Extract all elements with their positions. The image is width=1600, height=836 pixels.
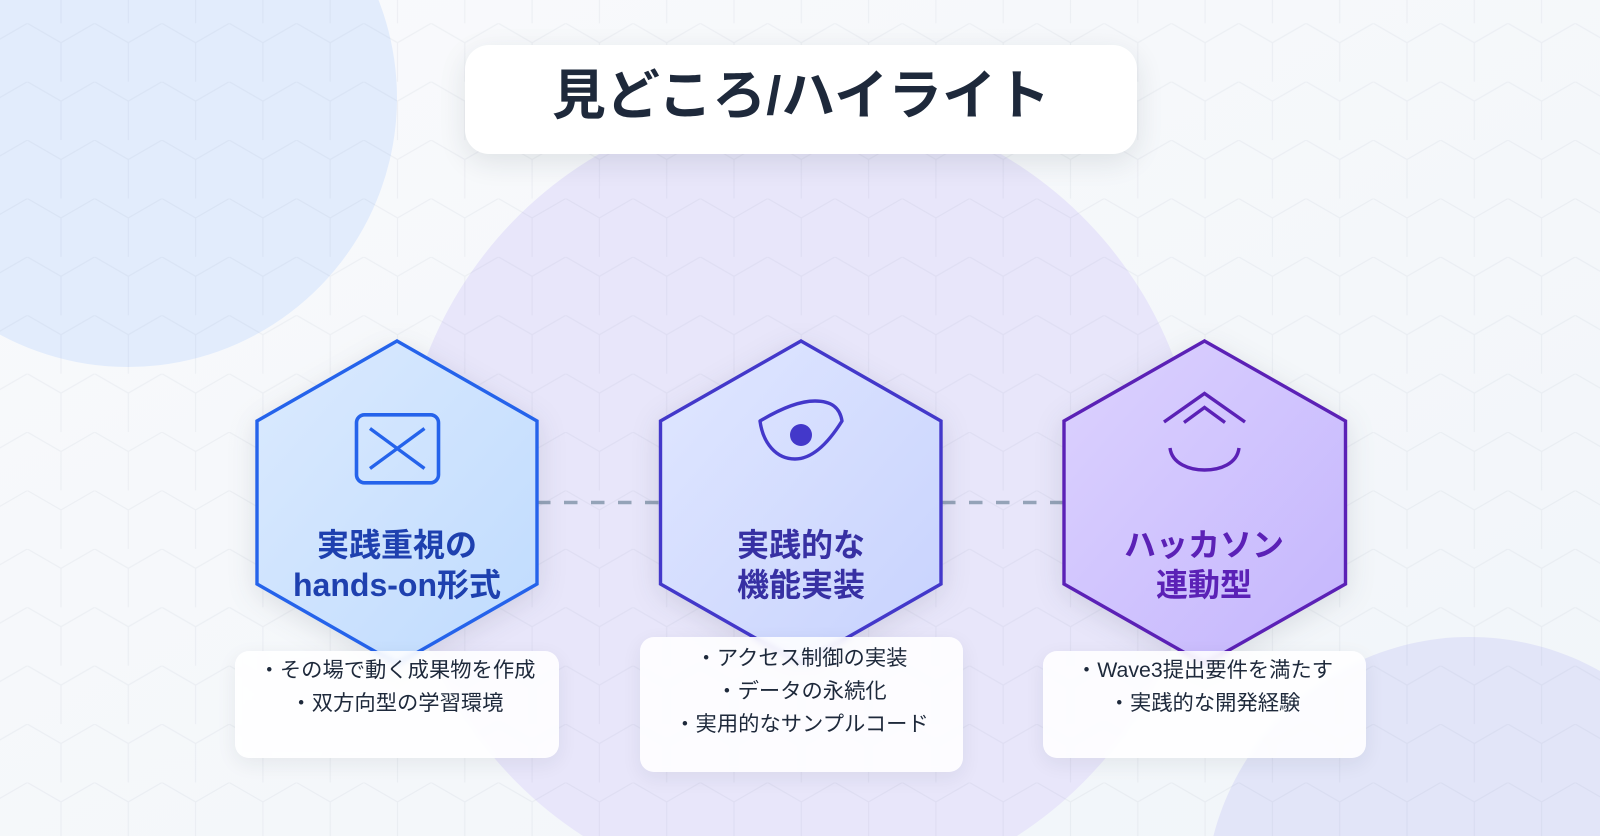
title: 見どころ/ハイライト — [552, 66, 1050, 126]
text card 2: ・アクセス制御の実装 — [696, 646, 907, 670]
text card 3 — [1043, 651, 1366, 758]
text card 1: ・その場で動く成果物を作成 — [259, 658, 535, 682]
heading: hands-on: hands-on形式 — [293, 567, 501, 603]
heading: features — [737, 527, 865, 603]
heading: hackathon — [1124, 527, 1284, 603]
icon: chevrons and smile — [1163, 392, 1246, 472]
heading: features: 実践的な — [737, 527, 865, 563]
heading: hackathon: 連動型 — [1156, 567, 1252, 603]
text card 1: ・双方向型の学習環境 — [290, 691, 503, 715]
icon: eye — [758, 399, 844, 461]
heading: hands-on — [293, 527, 501, 603]
text card 3: ・実践的な開発経験 — [1109, 691, 1300, 715]
title — [465, 45, 1137, 154]
icon: box with cross — [354, 413, 440, 485]
text card 1 — [235, 651, 559, 758]
text card 3: ・Wave3提出要件を満たす — [1076, 658, 1333, 682]
text card 2 — [640, 637, 963, 772]
heading: features: 機能実装 — [737, 567, 865, 603]
text card 2: ・データの永続化 — [716, 679, 887, 703]
heading: hands-on: 実践重視の — [317, 527, 477, 563]
text card 2: ・実用的なサンプルコード — [674, 712, 929, 736]
heading: hackathon: ハッカソン — [1124, 527, 1284, 563]
